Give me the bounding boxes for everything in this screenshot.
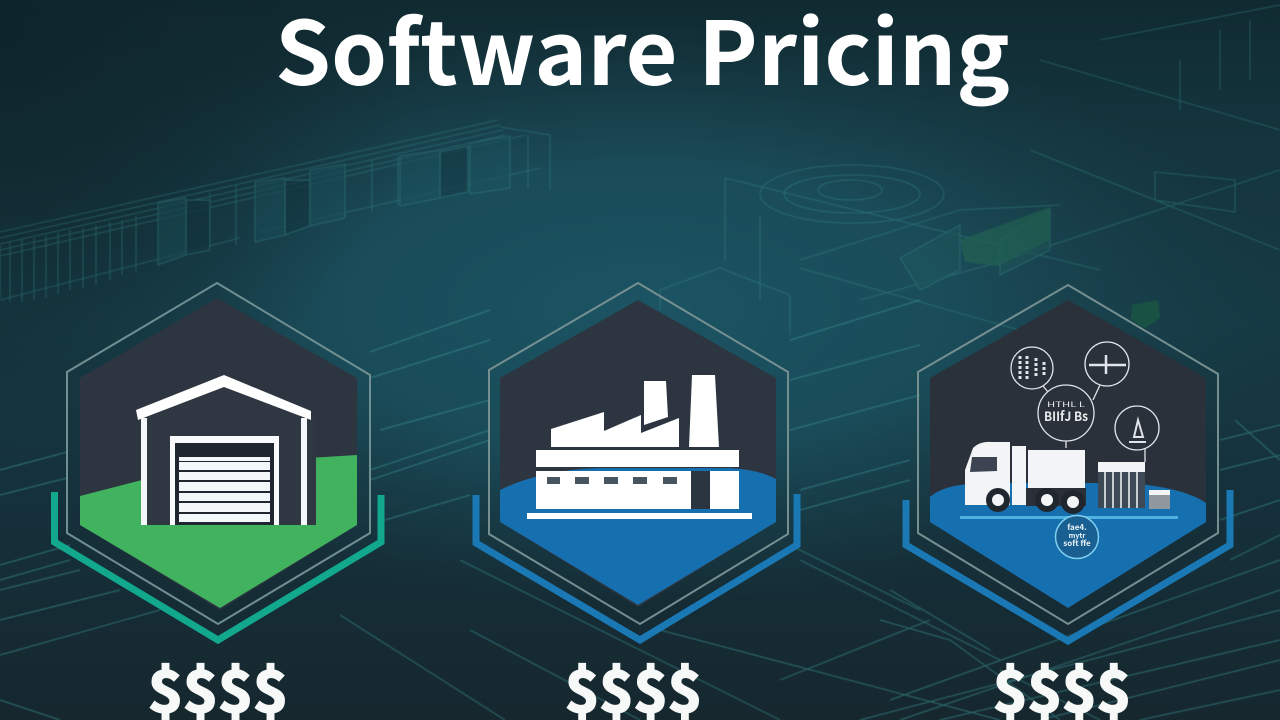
icon: connected circles (1011, 342, 1159, 462)
panel: factory tier (476, 283, 797, 720)
icon: factory building (527, 375, 752, 519)
bracket: warehouse (54, 492, 381, 640)
background: perspective floor lines (0, 300, 1280, 720)
hexagon outline: factory (489, 283, 788, 624)
icon: lower circle badge: soft ffe (1063, 538, 1091, 549)
icon: truck (965, 442, 1086, 514)
green ground: warehouse (80, 455, 357, 608)
background: factory wireframe, right (660, 5, 1280, 350)
background: warehouse wireframe, left racks (0, 120, 550, 302)
blue ground: factory (500, 468, 776, 605)
panel: logistics tier (906, 285, 1230, 720)
hexagon outline: logistics (918, 285, 1218, 624)
icon: connected circles: HTHL L (1047, 400, 1085, 410)
hexagon fill: logistics (930, 300, 1206, 608)
icon: lower circle badge (1056, 516, 1098, 558)
icon: lower circle badge: mytr (1069, 531, 1086, 541)
bracket: logistics (906, 490, 1230, 641)
panel: warehouse tier (54, 283, 381, 720)
hexagon outline: warehouse (67, 283, 370, 624)
blue ground: logistics (930, 483, 1206, 608)
icon: lower circle badge: fae4. (1067, 522, 1087, 533)
ground line: logistics (960, 516, 1178, 519)
icon: connected circles: BIIfJ Bs (1044, 406, 1088, 425)
icon: warehouse building (136, 375, 316, 525)
hexagon fill: warehouse (80, 298, 357, 610)
icon: container (1098, 462, 1170, 509)
bracket: factory (476, 494, 797, 640)
hexagon fill: factory (500, 300, 776, 607)
